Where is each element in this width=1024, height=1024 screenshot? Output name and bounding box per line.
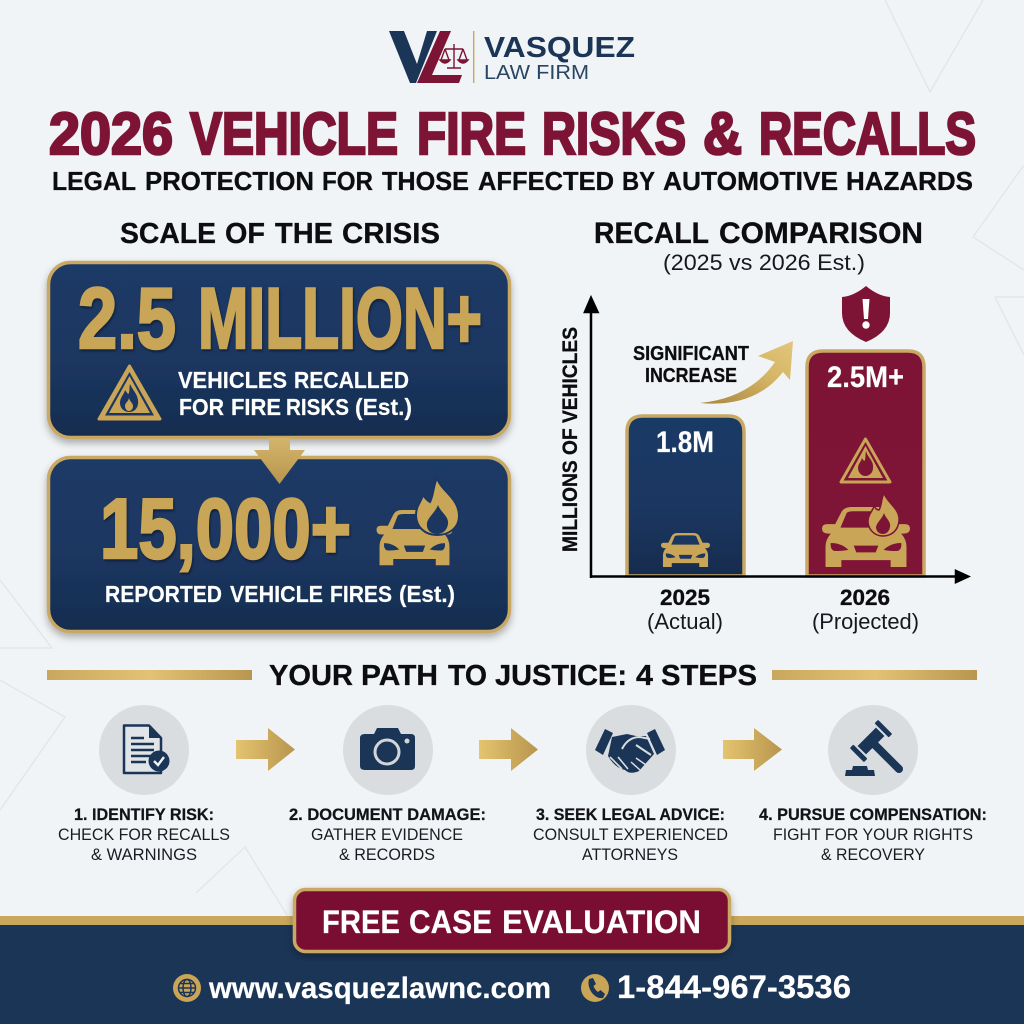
bar: 2026 [807,351,924,576]
arrow: significant increase [700,341,793,404]
label: vehicles recalled: RECALLED [294,367,409,393]
step 1 [58,705,230,864]
subtitle: AUTOMOTIVE [663,166,838,196]
heading: scale of the crisis [120,218,440,250]
title: 2026 [49,101,173,167]
section heading: path to justice [47,660,977,692]
label: reported vehicle fires: REPORTED [105,581,222,607]
button: free case evaluation [294,890,730,952]
x sublabel: actual: (Actual) [647,609,723,634]
text: step 1: & WARNINGS [91,845,197,864]
section heading: path to justice: PATH [361,660,438,692]
logo subtitle: LAW FIRM [484,62,589,84]
text: step 3: CONSULT EXPERIENCED [533,825,728,844]
icon: handshake [595,729,665,773]
heading: scale of the crisis: CRISIS [342,218,440,250]
heading: recall comparison: COMPARISON [719,217,923,250]
contact: website: www.vasquezlawnc.com [208,972,551,1005]
section heading: path to justice: 4 [636,660,653,692]
text: step 1: CHECK FOR RECALLS [58,825,230,844]
callout: significant increase [633,343,749,387]
label: for fire risks: FIRE [231,394,281,420]
logo divider [473,31,474,83]
text: step 1 [58,805,230,864]
title: VEHICLE [190,101,398,167]
title: & [703,101,742,167]
section heading: path to justice: JUSTICE: [495,660,627,692]
subtitle: FOR [322,166,373,196]
panel: vehicles recalled [48,262,510,438]
icon: burning car large [822,493,910,567]
text: step 4: FIGHT FOR YOUR RIGHTS [773,825,973,844]
label: reported vehicle fires [105,581,455,607]
text: step 4 [759,805,987,864]
text: step 2: 2. DOCUMENT DAMAGE: [289,805,486,824]
callout: significant increase: SIGNIFICANT [633,343,749,365]
icon: car small [661,533,710,567]
stat: 2.5 million [78,271,482,367]
subtitle: AFFECTED [478,166,614,196]
label: for fire risks [179,394,412,420]
label: reported vehicle fires: VEHICLE [230,581,323,607]
section heading: path to justice: YOUR [269,660,353,692]
stat: 2.5 million: 2.5 [78,271,176,367]
subtitle: HAZARDS [846,166,973,196]
icon: globe [173,974,201,1002]
step 4 [759,705,987,864]
text: step 2: GATHER EVIDENCE [311,825,463,844]
logo [389,31,635,84]
icon: warning triangle in bar [841,439,890,482]
text: step 4: & RECOVERY [821,845,925,864]
step 2 [289,705,486,864]
value: 2.5M+: 2.5M+ [827,361,904,394]
subtitle: THOSE [382,166,469,196]
text: step 3 [533,805,728,864]
contact: phone: 1-844-967-3536 [617,969,851,1005]
title [49,101,976,167]
text: step 1: 1. IDENTIFY RISK: [74,805,214,824]
step 3 [533,705,728,864]
icon: alert shield [842,286,890,342]
label: reported vehicle fires: FIRES [330,581,392,607]
text: step 2: & RECORDS [339,845,435,864]
icon: phone [581,974,609,1002]
title: FIRE [417,101,526,167]
x sublabel: projected: (Projected) [812,609,919,634]
stat: 2.5 million: MILLION+ [198,271,482,367]
icon: car on fire [376,478,459,565]
label: reported vehicle fires: (Est.) [399,581,455,607]
x axis [590,571,968,582]
y axis label: MILLIONS OF VEHICLES [559,327,582,552]
callout: significant increase: INCREASE [645,365,737,387]
arrow: step 3 to 4 [723,728,782,771]
subtitle: PROTECTION [145,166,314,196]
icon: gavel [845,720,899,776]
stat: 15,000: 15,000+ [100,482,351,577]
heading: scale of the crisis: OF [225,218,265,250]
button: free case evaluation: EVALUATION [502,904,701,940]
text: step 3: ATTORNEYS [582,845,678,864]
icon: document check [124,725,170,773]
heading: scale of the crisis: SCALE [120,218,216,250]
text: step 4: 4. PURSUE COMPENSATION: [759,805,987,824]
section heading: path to justice: TO [448,660,487,692]
heading: recall comparison [594,217,923,250]
section heading: path to justice: STEPS [661,660,757,692]
label: vehicles recalled [178,367,409,393]
heading: recall comparison: RECALL [594,217,709,250]
label: vehicles recalled: VEHICLES [178,367,287,393]
bar: 2025 [627,416,744,576]
heading: scale of the crisis: THE [275,218,333,250]
logo name: VASQUEZ [484,32,635,64]
logo V [389,31,437,83]
x label: 2025: 2025 [660,585,710,610]
text: step 2 [289,805,486,864]
icon: fire warning triangle [99,366,160,419]
subtitle: LEGAL [52,166,136,196]
x label: 2026: 2026 [840,585,890,610]
bar chart [559,286,968,634]
panel: reported fires [48,458,510,632]
label: for fire risks: FOR [179,394,224,420]
button: free case evaluation: FREE [322,904,400,940]
value: 1.8M: 1.8M [656,426,714,459]
arrow: step 2 to 3 [479,728,538,771]
icon: camera [360,728,415,770]
text: step 3: 3. SEEK LEGAL ADVICE: [536,805,725,824]
subtitle [52,166,973,196]
footer band [0,916,1024,1024]
logo scales icon [440,44,468,68]
subtitle: BY [622,166,655,196]
logo L [417,31,462,83]
arrow: down between panels [254,438,305,484]
chart subtitle: (2025 vs 2026 Est.) [663,250,865,275]
arrow: step 1 to 2 [236,728,295,771]
label: for fire risks: (Est.) [355,394,412,420]
label: for fire risks: RISKS [286,394,349,420]
button: free case evaluation: CASE [409,904,492,940]
y axis [585,298,598,578]
title: RISKS [542,101,686,167]
